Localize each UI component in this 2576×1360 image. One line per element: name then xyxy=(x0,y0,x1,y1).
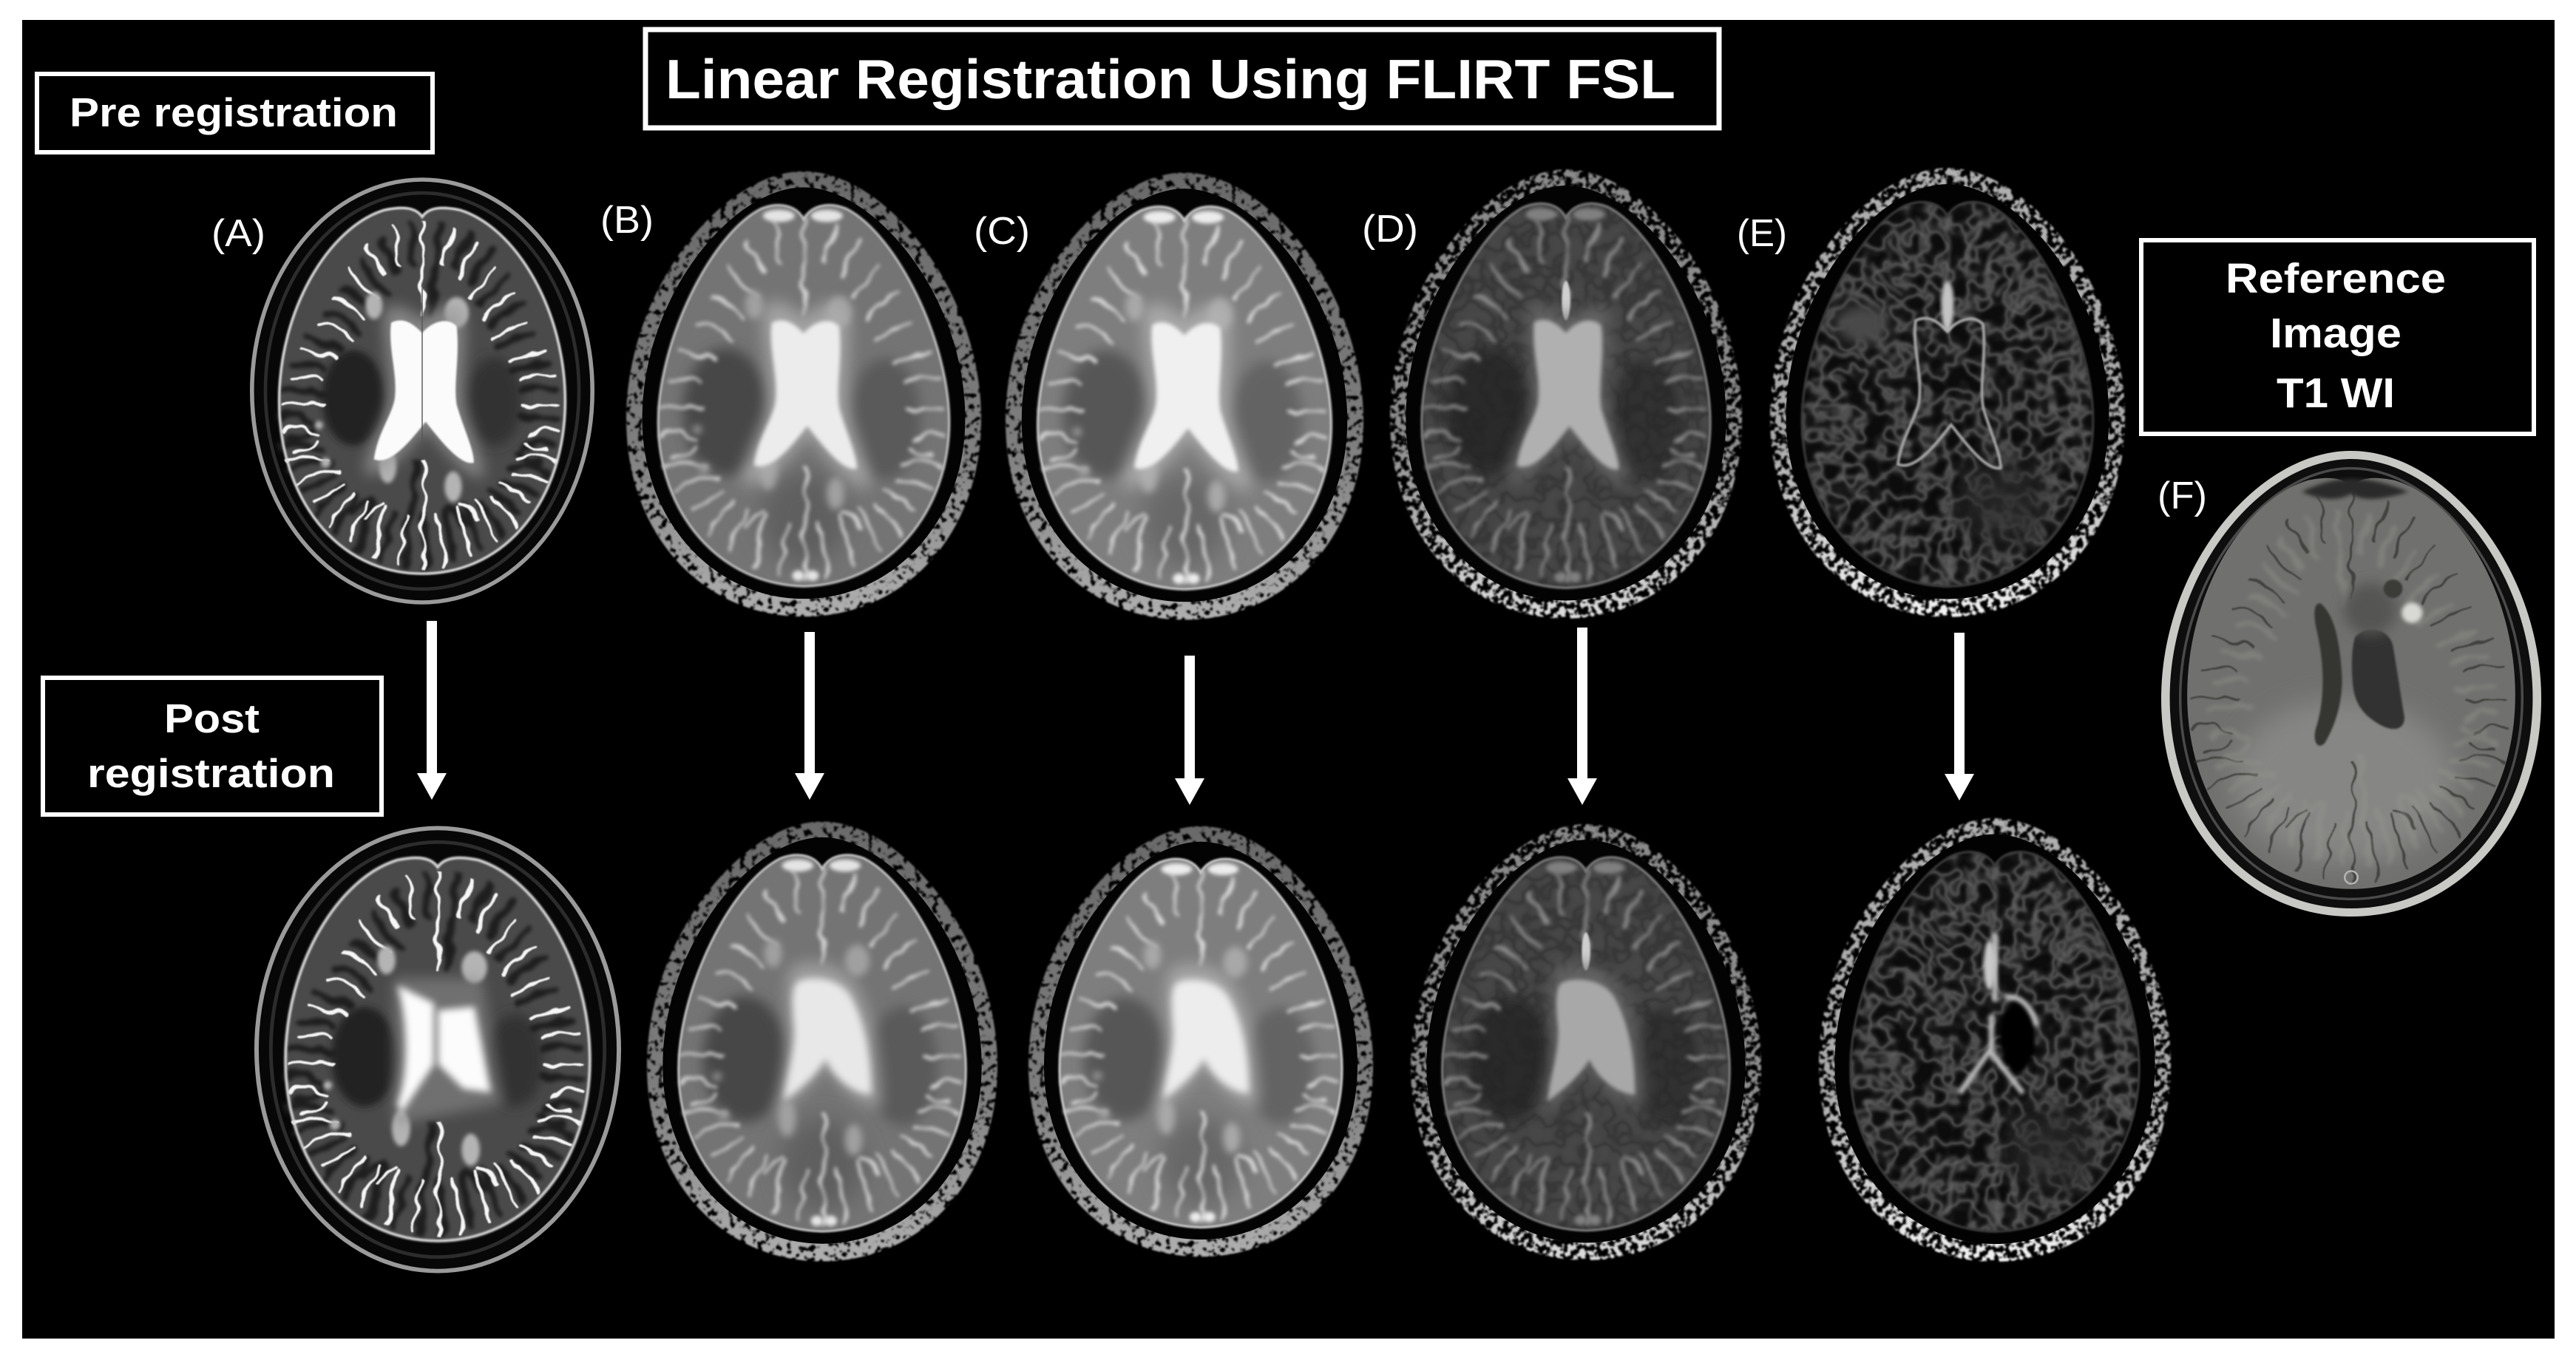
brain B pre registration xyxy=(626,171,981,616)
label box: post registration xyxy=(43,678,382,815)
brain C pre registration xyxy=(1006,172,1363,619)
panel label D: (D) xyxy=(1362,208,1418,251)
label box: reference image T1 WI xyxy=(2141,240,2534,434)
title: Linear Registration Using FLIRT FSL xyxy=(665,48,1675,110)
brain C post registration xyxy=(1028,826,1373,1257)
arrow A xyxy=(417,621,447,800)
label box: pre registration: Pre registration xyxy=(70,89,398,135)
panel label A: (A) xyxy=(211,212,265,255)
brain E pre registration xyxy=(1770,168,2125,617)
label box: pre registration xyxy=(37,74,433,152)
brain A post registration xyxy=(254,826,621,1273)
panel label E: (E) xyxy=(1737,212,1787,255)
title xyxy=(645,30,1719,128)
brain F reference T1 xyxy=(2161,451,2541,917)
panel label F: (F) xyxy=(2158,475,2207,517)
label box: reference image T1 WI: Reference xyxy=(2226,255,2446,302)
arrow C xyxy=(1175,656,1204,805)
brain D post registration xyxy=(1411,824,1761,1260)
label box: reference image T1 WI: T1 WI xyxy=(2277,370,2395,417)
brain B post registration xyxy=(647,822,997,1261)
label box: reference image T1 WI: Image xyxy=(2270,310,2402,357)
panel label C: (C) xyxy=(974,210,1030,253)
brain E post registration xyxy=(1819,818,2171,1262)
brain D pre registration xyxy=(1390,169,1742,619)
panel label B: (B) xyxy=(600,199,654,242)
label box: post registration: Post xyxy=(164,696,260,741)
arrow B xyxy=(795,632,824,800)
arrow E xyxy=(1945,633,1974,800)
arrow D xyxy=(1567,628,1597,805)
label box: post registration: registration xyxy=(87,750,335,796)
brain A pre registration xyxy=(250,177,594,605)
